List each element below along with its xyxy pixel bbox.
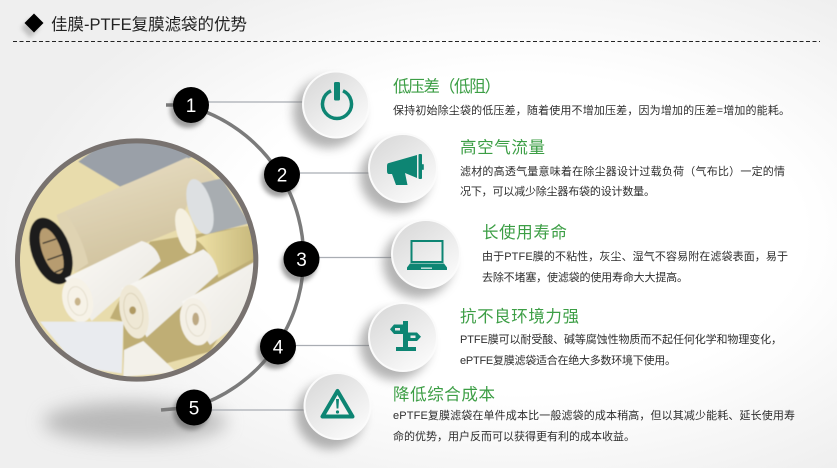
heading: 降低综合成本	[393, 385, 495, 404]
panel: environmental resistance	[360, 302, 782, 380]
icon: laptop	[383, 219, 461, 298]
node 4: 4	[273, 338, 284, 358]
node 5: 5	[189, 398, 199, 420]
text block	[482, 249, 788, 284]
text block	[460, 164, 785, 198]
icon: warning triangle	[296, 372, 372, 449]
arc connecting the numbered nodes	[161, 105, 304, 410]
text block: 滤材的高透气量意味着在除尘器设计过载负荷（气布比）一定的情	[460, 164, 785, 178]
panel: lower total cost	[296, 372, 795, 449]
flat bag lower left	[40, 322, 123, 373]
connector lines	[208, 102, 392, 410]
text block: 保持初始除尘袋的低压差，随着使用不增加压差，因为增加的压差=增加的能耗。	[393, 103, 790, 117]
small cream roll	[174, 208, 197, 254]
heading: 高空气流量	[460, 138, 545, 157]
heading: 抗不良环境力强	[460, 307, 579, 326]
text block: PTFE膜可以耐受酸、碱等腐蚀性物质而不起任何化学和物理变化，	[460, 332, 782, 346]
grey roll	[201, 178, 248, 234]
text block: 命的优势，用户反而可以获得更有利的成本收益。	[393, 429, 635, 443]
roll 1	[65, 241, 161, 321]
icon: title diamond	[21, 14, 44, 38]
text block: ePTFE复膜滤袋在单件成本比一般滤袋的成本稍高，但以其减少能耗、延长使用寿	[393, 408, 795, 422]
text block	[393, 408, 795, 443]
photo shadow	[43, 402, 227, 442]
panel: low pressure	[293, 70, 790, 148]
long bag	[57, 158, 217, 272]
node 2	[261, 156, 300, 197]
panel: long service life	[383, 219, 788, 298]
roll 2	[122, 249, 218, 337]
text block: 况下，可以减少除尘器布袋的设计数量。	[460, 184, 655, 198]
icon: power button	[293, 70, 370, 148]
icon: signpost	[360, 302, 438, 380]
yellow roll	[195, 225, 253, 278]
node 1	[170, 87, 209, 128]
text block	[460, 332, 782, 367]
title: 佳膜-PTFE复膜滤袋的优势	[51, 15, 247, 34]
title	[21, 14, 247, 38]
node 3	[281, 241, 320, 282]
panel: high air flow	[360, 133, 785, 212]
text block: 由于PTFE膜的不粘性，灰尘、湿气不容易附在滤袋表面，易于	[482, 249, 788, 263]
node 1: 1	[186, 96, 196, 117]
text block: 去除不堵塞，使滤袋的使用寿命大大提高。	[482, 270, 688, 284]
photo: rolls of filter material	[10, 135, 265, 385]
heading: 长使用寿命	[482, 223, 567, 242]
node 5	[173, 390, 212, 430]
heading: 低压差（低阻）	[393, 77, 501, 96]
roll 3	[190, 262, 254, 346]
node 3: 3	[296, 250, 307, 271]
node 4	[257, 328, 296, 369]
text block: ePTFE复膜滤袋适合在绝大多数环境下使用。	[460, 353, 676, 367]
icon: megaphone	[360, 133, 438, 212]
node 2: 2	[277, 166, 287, 186]
